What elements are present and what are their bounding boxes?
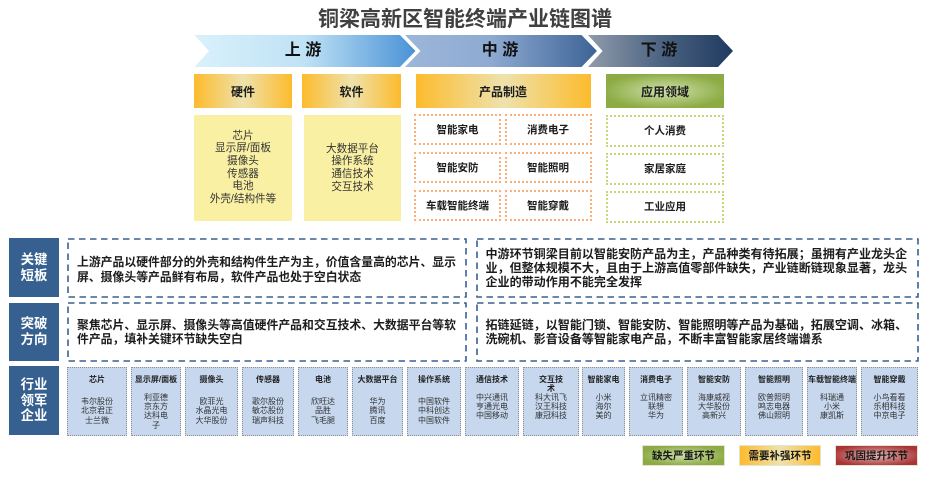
- product: in-vehicle terminals: 车载智能终端: [426, 200, 489, 212]
- card: smart appliances: 海尔: [596, 402, 612, 411]
- panel: hardware list: 电池: [232, 180, 254, 192]
- card: in-vehicle terminals: 科瑞通: [820, 392, 844, 402]
- card: batteries: 品胜: [315, 406, 331, 415]
- card: smart security: 智能安防: [698, 375, 730, 384]
- card: big data: 华为: [370, 397, 386, 406]
- row label: breakthrough direction: 突破: [21, 316, 47, 331]
- panel: upstream weaknesses: [67, 238, 467, 298]
- card: operating systems: 操作系统: [418, 375, 450, 384]
- card: operating systems: 中科创达: [418, 406, 450, 415]
- product: smart lighting: [504, 152, 592, 182]
- header: software: [302, 74, 401, 108]
- legend: consolidate and upgrade: 巩固提升环节: [845, 450, 908, 462]
- panel: upstream breakthrough: [67, 302, 467, 362]
- card: in-vehicle terminals: 康凯斯: [820, 411, 844, 420]
- card: displays: 达科电: [144, 411, 168, 420]
- panel: hardware list: 芯片: [232, 130, 254, 142]
- product: smart wearables: 智能穿戴: [527, 200, 569, 212]
- row label: breakthrough direction: 方向: [21, 332, 47, 347]
- panel: hardware list: 外壳/结构件等: [210, 193, 276, 205]
- card: cameras: 水晶光电: [196, 406, 228, 415]
- card: cameras: [185, 367, 238, 436]
- card: sensors: [242, 367, 294, 436]
- product: smart security: 智能安防: [436, 162, 478, 174]
- product: smart appliances: [414, 114, 501, 145]
- card: displays: 子: [152, 421, 160, 430]
- panel: upstream weaknesses: 屏、摄像头等产品鲜有布局，软件产品也处于空白状态: [77, 270, 361, 284]
- legend: needs strengthening: [739, 445, 821, 466]
- panel: midstream weaknesses: 中游环节铜梁目前以智能安防产品为主，产品种类有待拓展；虽拥有产业龙头企: [486, 247, 907, 261]
- panel: software list: 大数据平台: [326, 142, 379, 154]
- card: interaction: [523, 367, 579, 436]
- card: operating systems: [407, 367, 461, 436]
- card: smart appliances: 美的: [596, 411, 612, 420]
- header: software: 软件: [339, 84, 364, 98]
- card: chips: 韦尔股份: [81, 397, 113, 406]
- header: hardware: 硬件: [231, 84, 255, 98]
- panel: hardware list: [194, 115, 292, 221]
- card: consumer electronics: 联想: [648, 402, 664, 411]
- product: consumer electronics: [504, 114, 592, 144]
- card: interaction: 交互技术: [539, 375, 563, 393]
- row label: industry leaders: 企业: [21, 408, 47, 423]
- panel: midstream weaknesses: 企业的带动作用不能完全发挥: [486, 275, 642, 289]
- panel: upstream breakthrough: 聚焦芯片、显示屏、摄像头等高值硬件产品和交互技术、大数据平台等软: [77, 318, 456, 332]
- card: smart lighting: 佛山照明: [758, 411, 790, 420]
- card: smart appliances: [582, 367, 625, 436]
- card: batteries: 欣旺达: [311, 397, 335, 406]
- card: displays: 利亚德: [144, 392, 168, 402]
- card: cameras: 欧菲光: [200, 397, 224, 406]
- panel: midstream weaknesses: 业，但整体规模不大，且由于上游高值零部件缺失，产业链断链现象显著，龙头: [486, 261, 907, 275]
- card: big data: 腾讯: [370, 406, 386, 415]
- label: upstream: 上 游: [285, 42, 321, 59]
- application: home: [606, 152, 724, 184]
- label: midstream: 中 游: [482, 42, 518, 59]
- row label: key weaknesses: [9, 238, 59, 297]
- card: smart appliances: 智能家电: [588, 375, 620, 384]
- card: cameras: 大华股份: [196, 416, 228, 425]
- row label: breakthrough direction: [9, 303, 59, 361]
- row label: industry leaders: [9, 366, 59, 435]
- legend: severely lacking: [642, 445, 725, 466]
- panel: midstream breakthrough: 拓链延链，以智能门锁、智能安防、智能照明等产品为基础，拓展空调、冰箱、: [486, 318, 907, 332]
- panel: upstream weaknesses: 上游产品以硬件部分的外壳和结构件生产为主，价值含量高的芯片、显示: [77, 255, 456, 269]
- application: personal consumption: 个人消费: [644, 125, 686, 137]
- card: communications: 亨通光电: [476, 402, 508, 411]
- card: smart lighting: 鸣志电器: [758, 402, 790, 411]
- card: big data: 大数据平台: [358, 375, 398, 384]
- card: interaction: 康冠科技: [535, 411, 567, 420]
- card: batteries: [298, 367, 348, 436]
- card: in-vehicle terminals: [807, 367, 857, 436]
- card: sensors: 传感器: [256, 375, 280, 384]
- panel: software list: 通信技术: [331, 168, 374, 180]
- panel: midstream weaknesses: [476, 238, 919, 298]
- card: displays: 京东方: [144, 402, 168, 411]
- card: consumer electronics: 华为: [648, 411, 664, 420]
- header: product manufacturing: [416, 74, 590, 108]
- header: product manufacturing: 产品制造: [479, 84, 527, 98]
- panel: software list: [304, 115, 401, 221]
- card: chips: 芯片: [89, 375, 105, 384]
- card: smart security: [687, 367, 741, 436]
- product: consumer electronics: 消费电子: [527, 124, 569, 136]
- card: smart wearables: 中京电子: [874, 411, 906, 420]
- header: application fields: 应用领域: [641, 84, 689, 98]
- card: chips: [67, 367, 127, 436]
- product: smart security: [414, 152, 501, 183]
- panel: midstream breakthrough: 洗碗机、影音设备等智能家电产品，不断丰富智能家居终端谱系: [486, 332, 823, 346]
- card: sensors: 敏芯股份: [252, 406, 284, 415]
- panel: midstream breakthrough: [476, 302, 919, 362]
- chain arrows: upstream, midstream, downstream: [194, 35, 733, 67]
- card: displays: [131, 367, 181, 436]
- card: displays: 显示屏/面板: [135, 375, 177, 384]
- product: smart lighting: 智能照明: [527, 162, 569, 174]
- panel: software list: 交互技术: [331, 181, 374, 193]
- card: operating systems: 中国软件: [418, 416, 450, 425]
- legend: needs strengthening: 需要补强环节: [748, 450, 812, 462]
- card: interaction: 汉王科技: [535, 402, 567, 411]
- card: smart lighting: [745, 367, 803, 436]
- card: smart wearables: 乐相科技: [874, 402, 906, 411]
- card: sensors: 歌尔股份: [252, 397, 284, 406]
- card: consumer electronics: [629, 367, 683, 436]
- card: chips: 士兰微: [85, 416, 109, 425]
- application: industrial: 工业应用: [644, 201, 686, 213]
- card: chips: 北京君正: [81, 406, 113, 415]
- legend: consolidate and upgrade: [835, 445, 918, 466]
- product: in-vehicle terminals: [414, 190, 501, 221]
- card: big data: [352, 367, 403, 436]
- panel: hardware list: 传感器: [227, 168, 259, 180]
- card: smart wearables: 小鸟看看: [874, 392, 906, 402]
- card: operating systems: 中国软件: [418, 397, 450, 406]
- card: smart wearables: [861, 367, 918, 436]
- card: smart security: 大华股份: [698, 402, 730, 411]
- card: smart lighting: 智能照明: [758, 375, 790, 384]
- card: in-vehicle terminals: 小米: [824, 402, 840, 411]
- panel: hardware list: 摄像头: [227, 155, 259, 167]
- label: downstream: 下 游: [641, 42, 677, 59]
- panel: software list: 操作系统: [331, 155, 374, 167]
- card: cameras: 摄像头: [200, 375, 224, 384]
- header: application fields: [606, 74, 724, 108]
- card: communications: 中国移动: [476, 411, 508, 420]
- product: smart wearables: [504, 190, 592, 220]
- card: smart wearables: 智能穿戴: [874, 375, 906, 384]
- card: in-vehicle terminals: 车载智能终端: [808, 375, 856, 384]
- card: smart appliances: 小米: [596, 392, 612, 402]
- card: batteries: 电池: [315, 375, 331, 384]
- card: communications: [465, 367, 519, 436]
- card: big data: 百度: [370, 416, 386, 425]
- application: personal consumption: [606, 114, 724, 146]
- panel: hardware list: 显示屏/面板: [215, 142, 271, 154]
- row label: industry leaders: 行业: [21, 377, 47, 392]
- card: batteries: 飞毛腿: [311, 416, 335, 425]
- title: 铜梁高新区智能终端产业链图谱: [318, 8, 612, 31]
- card: smart lighting: 欧普照明: [758, 392, 790, 402]
- product: smart appliances: 智能家电: [436, 124, 478, 136]
- card: communications: 中兴通讯: [476, 392, 508, 402]
- header: hardware: [194, 74, 292, 108]
- row label: key weaknesses: 关键: [21, 252, 47, 267]
- card: consumer electronics: 消费电子: [640, 375, 672, 384]
- application: industrial: [606, 190, 724, 222]
- legend: severely lacking: 缺失严重环节: [652, 450, 715, 462]
- row label: industry leaders: 领军: [21, 393, 47, 408]
- panel: upstream breakthrough: 件产品，填补关键环节缺失空白: [77, 332, 243, 346]
- card: consumer electronics: 立讯精密: [640, 392, 672, 402]
- row label: key weaknesses: 短板: [21, 268, 47, 282]
- card: interaction: 科大讯飞: [535, 392, 567, 402]
- card: communications: 通信技术: [476, 375, 508, 384]
- card: sensors: 瑞声科技: [252, 416, 284, 425]
- card: smart security: 高新兴: [702, 411, 726, 420]
- application: home: 家居家庭: [644, 163, 686, 175]
- card: smart security: 海康威视: [698, 392, 730, 402]
